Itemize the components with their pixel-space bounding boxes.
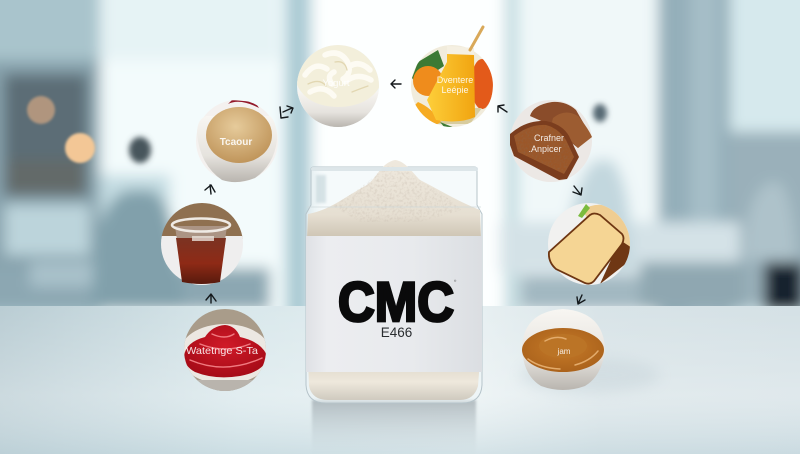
cake slice (549, 214, 624, 284)
powder bottom (308, 360, 480, 400)
jar rim (311, 167, 478, 171)
label: Tcaour (220, 137, 252, 148)
arrow: ice cream to yogurt (280, 106, 293, 118)
food circle: yogurt (295, 44, 380, 129)
jar label (306, 236, 482, 372)
arrow: ketchup to cup (206, 294, 216, 303)
cake leaf (578, 204, 590, 218)
arrow: bread to cake (573, 186, 582, 195)
arrow: juice to yogurt (391, 80, 401, 88)
food circle: ketchup (184, 309, 266, 391)
arrow: cake to jam (577, 295, 585, 304)
label: Watetnge S-Ta (186, 345, 258, 357)
E number: E466 (381, 325, 412, 340)
food circle: sponge cake (547, 202, 632, 287)
table surface (0, 306, 800, 454)
arrow: bread to juice (498, 105, 507, 112)
food circle: jam (522, 309, 605, 390)
registered mark: ® (454, 279, 457, 283)
food circle: tea in plastic cup (161, 203, 244, 286)
juice glass (427, 52, 475, 121)
label: Yogurt (322, 78, 350, 89)
powder heap (307, 160, 481, 238)
food circle: ice cream (195, 100, 279, 184)
jar reflection (312, 400, 476, 454)
food circle: dark bread (509, 99, 594, 184)
CMC jar (306, 160, 482, 403)
blurred laboratory background (0, 0, 800, 320)
cup (175, 226, 227, 240)
blurred background people heads and lights (27, 96, 607, 163)
product name: CMC (338, 270, 454, 333)
food circle: orange juice: Leépie (441, 85, 469, 95)
label: Dventere (437, 75, 473, 85)
food circle: dark bread: .Anpicer (528, 144, 562, 154)
jar glass (306, 167, 482, 403)
label: jam (557, 347, 571, 356)
food circle: orange juice (410, 27, 494, 128)
arrow: cup to ice cream (205, 185, 215, 194)
label: Crafner (534, 133, 564, 143)
